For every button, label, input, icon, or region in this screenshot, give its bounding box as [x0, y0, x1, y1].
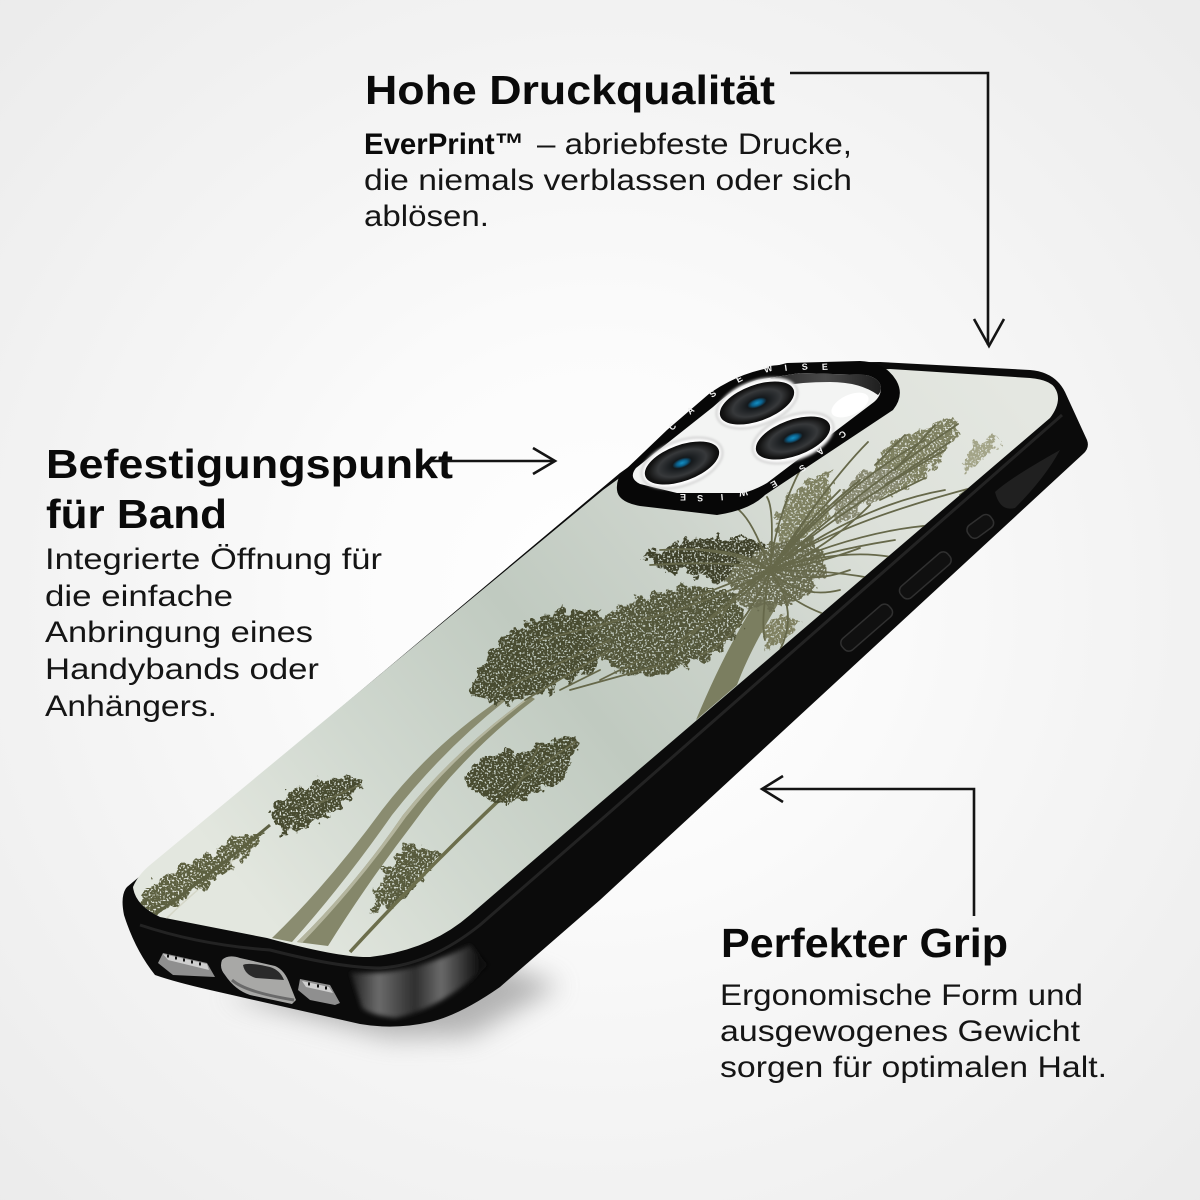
text block: die einfache	[45, 580, 233, 613]
text block	[720, 979, 1107, 1084]
ring lettering bottom: CASEWISE	[680, 428, 848, 503]
palm fronds	[315, 424, 995, 805]
phone drop shadow	[225, 965, 560, 1038]
text block: Anbringung eines	[45, 616, 313, 649]
screen print sky	[133, 369, 1058, 957]
camera window	[633, 373, 881, 493]
palm trees print	[133, 418, 1000, 952]
side matte patch	[995, 450, 1060, 509]
callout: print quality	[364, 67, 852, 233]
text block	[45, 543, 382, 723]
text block: sorgen für optimalen Halt.	[720, 1051, 1107, 1084]
callout: strap attachment	[45, 441, 453, 723]
heading: Perfekter Grip	[721, 920, 1008, 966]
camera ring	[617, 361, 900, 515]
upper lens	[710, 368, 804, 438]
heading	[46, 441, 453, 537]
text block: ablösen.	[364, 200, 489, 233]
phone case	[123, 362, 1088, 1027]
arrow: to case side	[762, 776, 974, 916]
right speaker grille	[298, 979, 340, 1005]
arrow: to print surface	[790, 73, 1004, 346]
text block: Anhängers.	[45, 690, 217, 723]
left lens	[635, 428, 729, 498]
text block: EverPrint™	[364, 128, 524, 161]
arrow: to camera ring	[430, 448, 555, 474]
tall trunks	[150, 696, 535, 952]
callout: grip	[720, 920, 1107, 1084]
corner gloss	[350, 945, 488, 1018]
left speaker grille	[158, 953, 215, 977]
text block: Ergonomische Form und	[720, 979, 1083, 1012]
text block	[364, 128, 852, 233]
right lens	[746, 403, 840, 473]
background palm crown behind trunks	[370, 842, 440, 915]
case body	[123, 362, 1088, 1027]
heading: Befestigungspunkt	[46, 441, 453, 487]
heading: Hohe Druckqualität	[365, 67, 775, 113]
text block: ausgewogenes Gewicht	[720, 1015, 1081, 1048]
palm crowns	[133, 418, 1000, 918]
ring lettering top: CASEWISE	[667, 362, 828, 432]
side ridge	[140, 415, 1062, 968]
text block: die niemals verblassen oder sich	[364, 164, 852, 197]
text block: – abriebfeste Drucke,	[537, 128, 852, 161]
charging port	[221, 956, 296, 1004]
flash highlight	[828, 387, 872, 423]
ring body	[617, 361, 900, 515]
heading: für Band	[46, 491, 227, 537]
large palm trunk	[696, 600, 778, 720]
text block: Handybands oder	[45, 653, 319, 686]
text block: Integrierte Öffnung für	[45, 543, 382, 576]
volume buttons	[838, 512, 996, 654]
inner bevel top	[770, 373, 881, 395]
